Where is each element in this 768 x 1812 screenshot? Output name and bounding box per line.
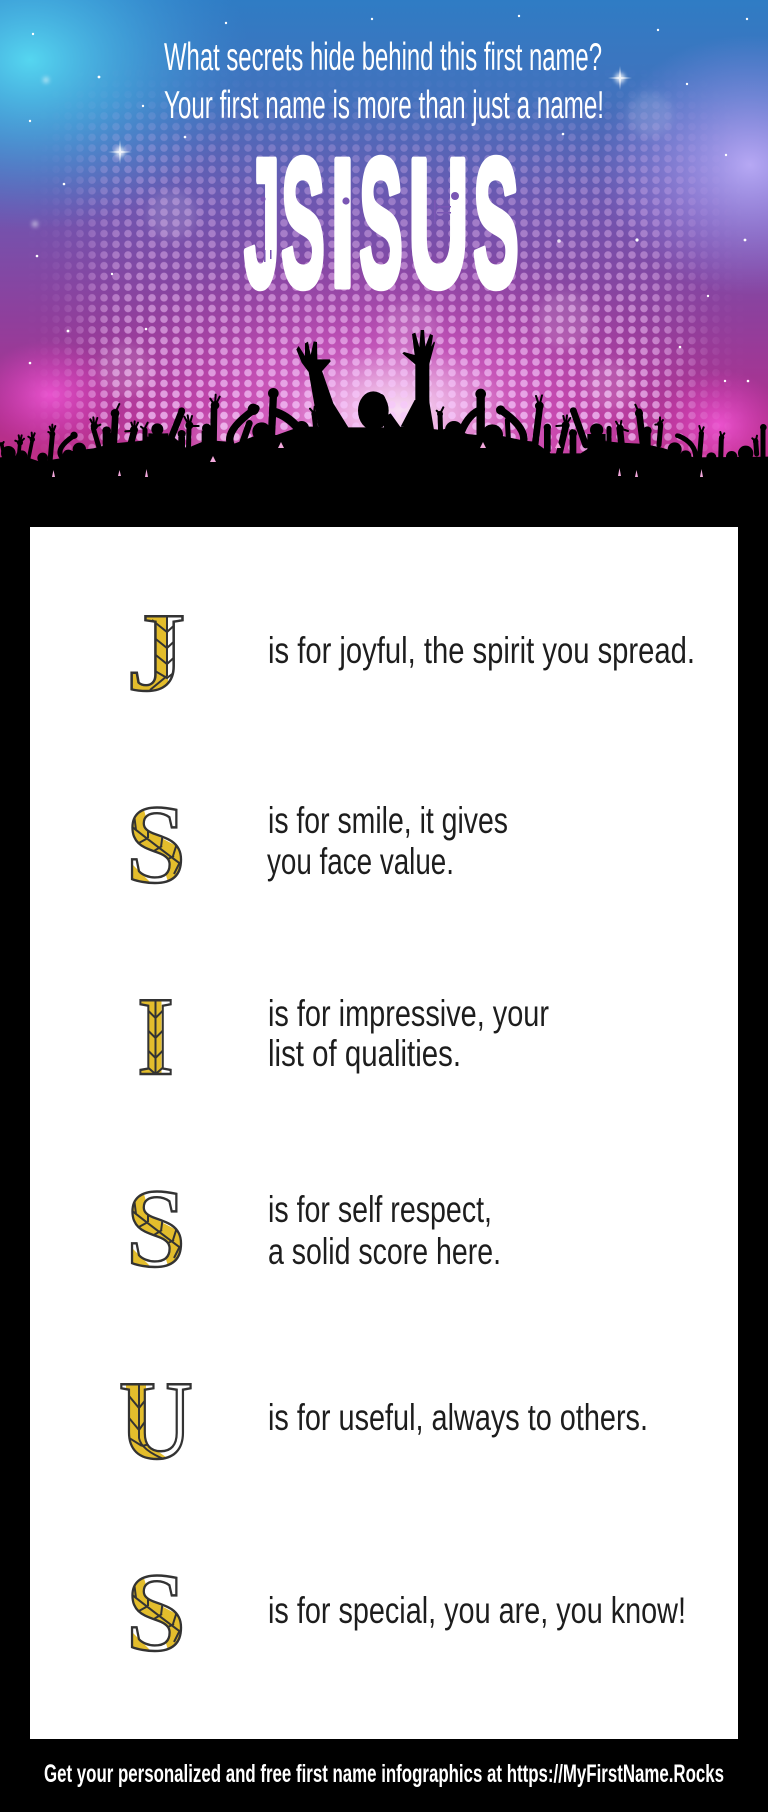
stars and sparkles [29,15,749,382]
text: I line: is for impressive, your [268,993,549,1034]
crowd: left half [0,341,389,490]
small gaps in crowd [52,442,703,477]
icon: letter S [130,806,182,884]
text: U line: is for useful, always to others. [268,1397,648,1438]
name title: U [408,120,469,325]
text: S line (self respect) [268,1189,501,1272]
icon: letter J [130,615,184,692]
icon: letter S [130,1190,182,1268]
text: I line [268,993,549,1074]
crowd silhouette [0,330,768,490]
text: S line (self respect): a solid score here. [268,1231,501,1272]
text: S line (smile) [267,800,508,882]
text: S line (smile): is for smile, it gives [268,800,508,841]
icon: letter S: S [126,1551,186,1675]
name title: J [244,120,280,325]
name title: S [281,120,325,325]
name title: S [359,120,403,325]
text: I line: list of qualities. [268,1033,461,1074]
text: S [473,120,519,325]
name title [244,120,519,325]
icon: letter I [139,999,172,1076]
icon: letter U: U [119,1359,193,1483]
text: S line (self respect): is for self respect, [268,1189,492,1230]
header background: stage lights [0,0,768,462]
icon: letter S [130,1574,182,1652]
icon: letter J: J [126,590,186,714]
crowd: right half [375,330,768,490]
icon: letter S: S [126,1167,186,1291]
text: S line (smile): you face value. [267,841,454,882]
icon: letter U [120,1383,192,1460]
icon: letter I: I [137,975,174,1099]
panel: white letters panel [30,527,738,1739]
name title: I [330,120,355,325]
icon: letter S: S [126,783,186,907]
